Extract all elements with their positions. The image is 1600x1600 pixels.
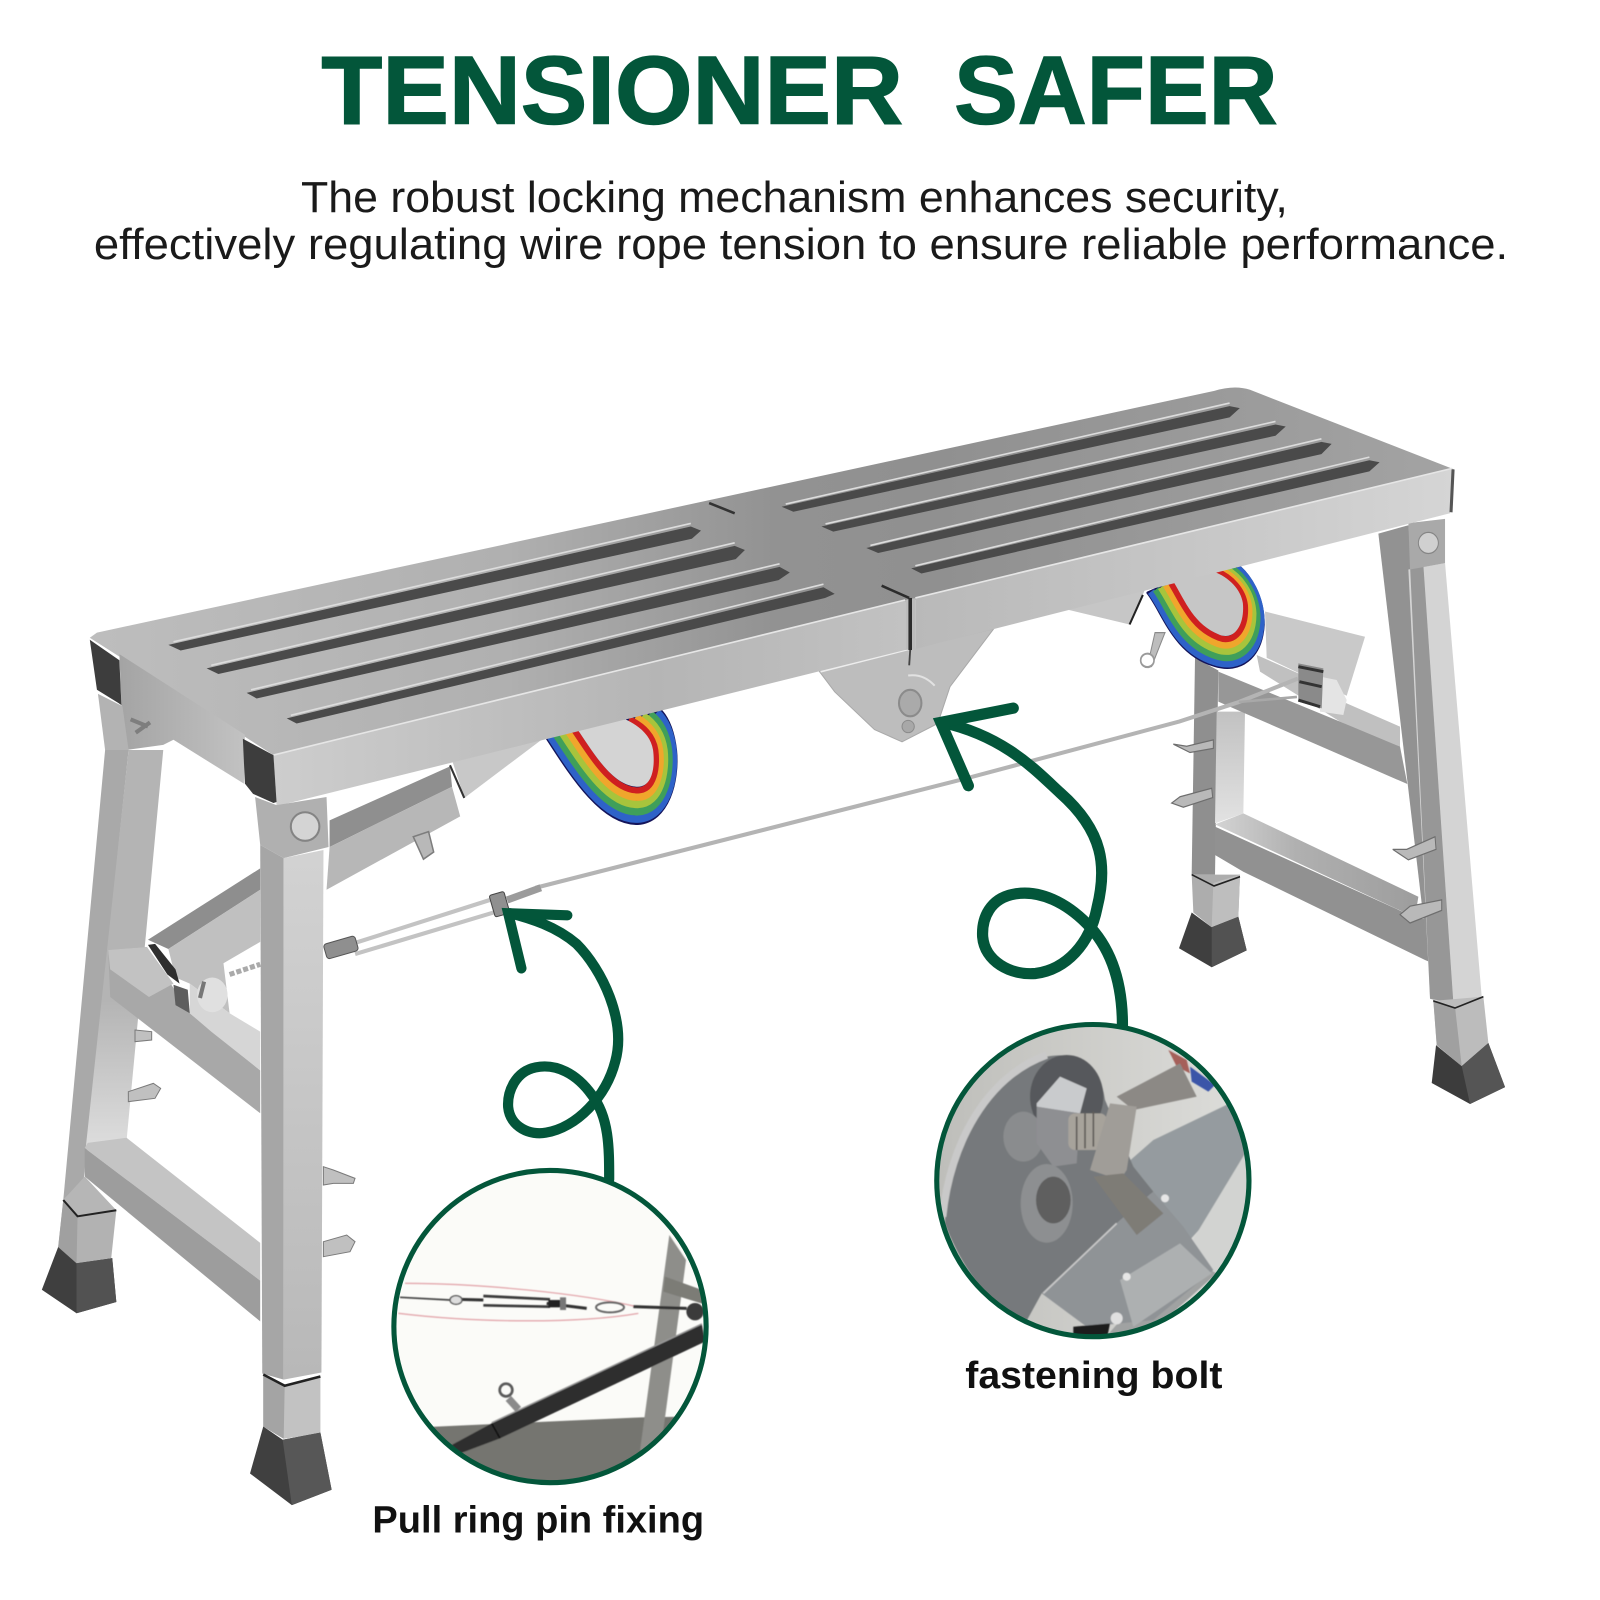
callout arrow: pull ring pin bbox=[508, 913, 618, 1180]
title: TENSIONER bbox=[321, 35, 903, 144]
slots right half bbox=[782, 406, 1380, 573]
subtitle text: effectively regulating wire rope tension to ensure reliable performance. bbox=[94, 220, 1508, 269]
rainbow strap right bbox=[1148, 567, 1263, 667]
rope clamp, right bbox=[1298, 663, 1347, 715]
corner caps bbox=[90, 640, 277, 803]
title bbox=[321, 35, 1278, 144]
label: fastening bolt: fastening bolt bbox=[965, 1354, 1223, 1396]
workbench illustration bbox=[42, 387, 1505, 1505]
subtitle text bbox=[94, 173, 1508, 269]
right end frame bbox=[1141, 519, 1505, 1104]
turnbuckle bbox=[323, 888, 541, 959]
rainbow strap left bbox=[547, 711, 676, 823]
slots left half bbox=[168, 527, 835, 723]
slot highlights bbox=[173, 403, 1369, 715]
front fascia right bbox=[915, 468, 1452, 649]
front fascia left bbox=[273, 600, 905, 806]
callout arrow: fastening bolt bbox=[941, 708, 1122, 1026]
subtitle text: The robust locking mechanism enhances security, bbox=[301, 173, 1288, 222]
pins on left legs bbox=[128, 1030, 355, 1257]
wire rope bbox=[230, 679, 1298, 974]
title: SAFER bbox=[954, 35, 1278, 144]
diagonal strut, left bbox=[148, 733, 551, 1013]
front left leg bbox=[250, 797, 332, 1505]
detail circle: pull ring pin bbox=[388, 1163, 720, 1493]
bench top bbox=[90, 387, 1454, 806]
label: pull ring pin fixing: Pull ring pin fixing bbox=[372, 1499, 704, 1541]
bracket under bench, right bbox=[1061, 582, 1145, 624]
left end frame bbox=[42, 654, 434, 1321]
pins on right legs bbox=[1172, 740, 1442, 923]
hinge plate bbox=[819, 628, 994, 742]
detail circle: fastening bolt bbox=[929, 1020, 1257, 1347]
